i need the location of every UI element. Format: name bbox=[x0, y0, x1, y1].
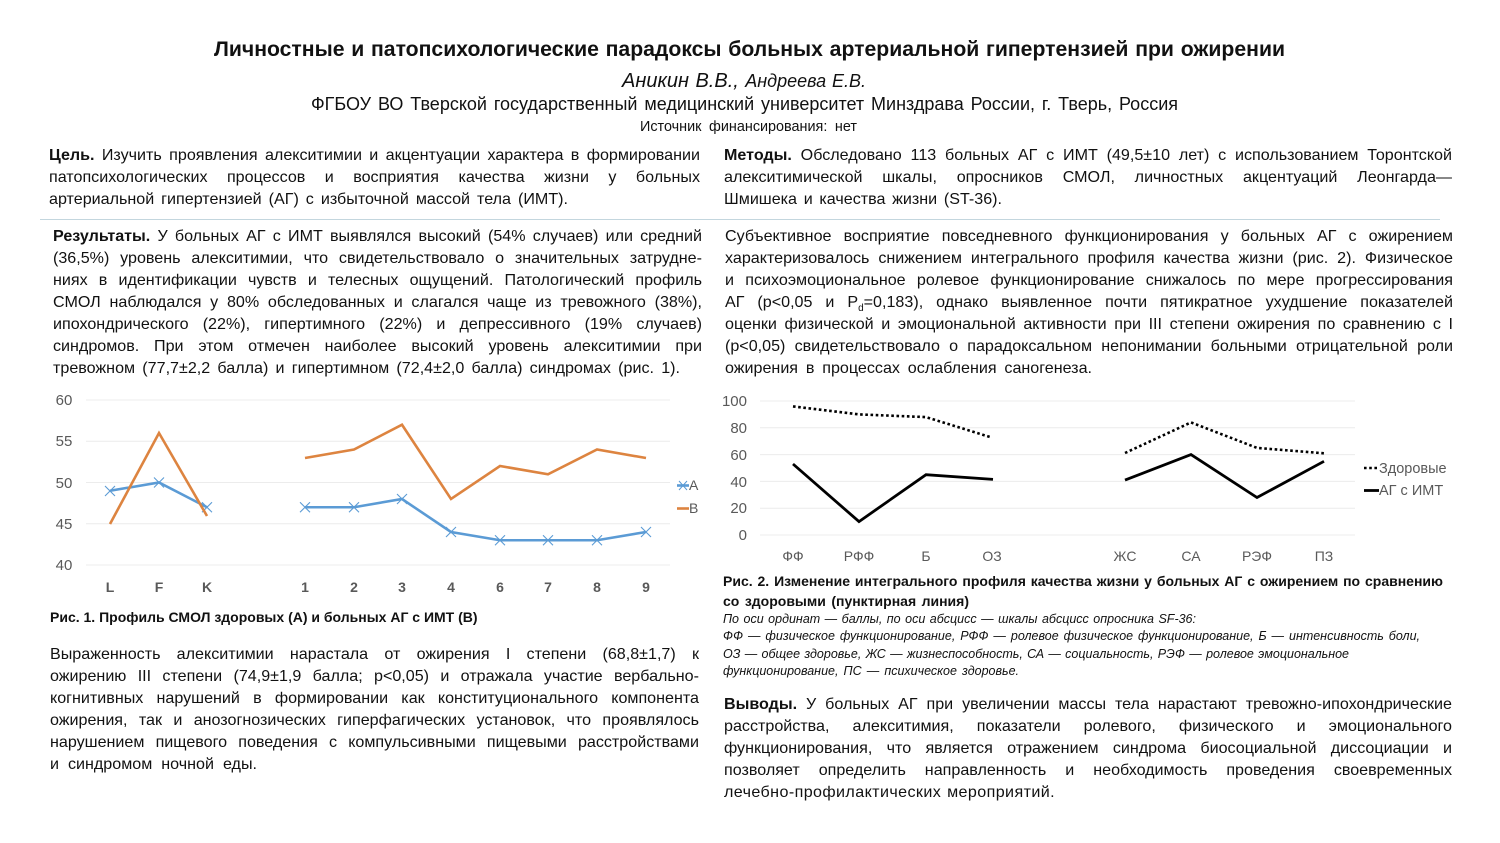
x axis labels: СА bbox=[1181, 548, 1201, 564]
text block: alexithymia: Выраженность алекситимии нарастала от ожирения I степени (68,8±1,7) к bbox=[50, 645, 699, 663]
text block: alexithymia: ожирения, так и анозогнозических гиперфагических установок, что проявлялось bbox=[50, 711, 699, 729]
y axis labels: 55 bbox=[56, 433, 72, 450]
text block: aim: артериальной гипертензией (АГ) с избыточной массой тела (ИМТ). bbox=[49, 190, 568, 208]
caption: figure 2 bbox=[723, 573, 1443, 609]
y axis labels: 40 bbox=[730, 474, 747, 491]
text block: subjective perception: характеризовалось снижением интегрального профиля качества жизни (рис. 2). Физическое bbox=[725, 249, 1453, 267]
y axis labels: 20 bbox=[730, 500, 747, 517]
y axis labels: 80 bbox=[730, 420, 747, 437]
figure 2 notes bbox=[723, 612, 1420, 678]
affiliation: ФГБОУ ВО Тверской государственный медицинский университет Минздрава России, г. Тверь, Россия bbox=[311, 94, 1178, 114]
text block: subjective perception: оценки физической и эмоциональной активности при III степени ожирения по сравнению с I bbox=[725, 315, 1453, 333]
legend: B bbox=[689, 500, 698, 516]
text block: alexithymia: ожирению III степени (74,9±1,9 балла; р<0,05) и отражала участие вербально- bbox=[50, 667, 699, 685]
series: healthy bbox=[793, 406, 1324, 453]
x axis labels: 2 bbox=[350, 579, 358, 595]
authors: Аникин В.В., Андреева Е.В. bbox=[622, 70, 866, 92]
x axis labels: ПЗ bbox=[1315, 548, 1333, 564]
y axis labels bbox=[56, 392, 72, 574]
x axis labels: РЭФ bbox=[1242, 548, 1272, 564]
funding source: Источник финансирования: нет bbox=[640, 119, 857, 135]
x axis labels: K bbox=[202, 579, 212, 595]
text block: aim: патопсихологических процессов и восприятия качества жизни у больных bbox=[49, 168, 700, 186]
x axis labels: 8 bbox=[593, 579, 601, 595]
x axis labels: 4 bbox=[447, 579, 455, 595]
text block: results bbox=[53, 227, 702, 377]
text block: conclusions: лечебно-профилактических мероприятий. bbox=[724, 783, 1055, 801]
text block: alexithymia: и синдромом ночной еды. bbox=[50, 755, 257, 773]
text block: subjective perception bbox=[725, 227, 1453, 377]
text block: methods: алекситимической шкалы, опросников СМОЛ, личностных акцентуаций Леонгарда— bbox=[724, 168, 1452, 186]
legend bbox=[1364, 461, 1447, 499]
y axis labels bbox=[722, 393, 747, 544]
series B bbox=[110, 425, 646, 524]
text block: conclusions: функционирования, что является отражением синдрома биосоциальной диссоциации и bbox=[724, 739, 1452, 757]
x axis labels: L bbox=[106, 579, 115, 595]
text block: subjective perception: ожирения в процессах ослабления саногенеза. bbox=[725, 359, 1092, 377]
x axis labels bbox=[106, 579, 650, 595]
x axis labels bbox=[782, 548, 1333, 564]
text block: aim: Цель. Изучить проявления алекситимии и акцентуации характера в формировании bbox=[49, 146, 700, 164]
text block: methods: Методы. Обследовано 113 больных АГ с ИМТ (49,5±10 лет) с использованием Торонтской bbox=[724, 146, 1452, 164]
series: hypertension with high BMI bbox=[793, 455, 1324, 522]
x axis labels: 7 bbox=[544, 579, 552, 595]
y axis labels: 40 bbox=[56, 557, 72, 574]
legend: Здоровые bbox=[1379, 461, 1447, 477]
text block: alexithymia: нарушением пищевого поведения с компульсивными пищевыми расстройствами bbox=[50, 733, 699, 751]
x axis labels: 9 bbox=[642, 579, 650, 595]
figure 2 notes: ОЗ — общее здоровье, ЖС — жизнеспособность, СА — социальность, РЭФ — ролевое эмоциональное bbox=[723, 647, 1349, 661]
y axis labels: 60 bbox=[56, 392, 72, 409]
y axis labels: 60 bbox=[730, 447, 747, 464]
text block: subjective perception: (р<0,05) свидетельствовало о парадоксальном непонимании больными отрицательной роли bbox=[725, 337, 1453, 355]
y axis labels: 45 bbox=[56, 516, 72, 533]
chart: MMPI profile (figure 1) bbox=[56, 392, 699, 595]
x axis labels: РФФ bbox=[844, 548, 874, 564]
x axis labels: 3 bbox=[398, 579, 406, 595]
series A bbox=[105, 478, 651, 545]
x axis labels: F bbox=[155, 579, 164, 595]
text block: aim bbox=[49, 146, 700, 208]
text block: results: синдромов. При этом отмечен наиболее высокий уровень алекситимии при bbox=[53, 337, 702, 355]
text block: conclusions: Выводы. У больных АГ при увеличении массы тела нарастают тревожно-ипохондрические bbox=[724, 695, 1452, 713]
text block: conclusions: позволяет определить направленность и необходимость проведения своевременных bbox=[724, 761, 1452, 779]
figure 2 notes: ФФ — физическое функционирование, РФФ — ролевое физическое функционирование, Б — интенсивность боли, bbox=[723, 629, 1420, 643]
legend bbox=[677, 477, 699, 516]
text block: conclusions: расстройства, алекситимия, показатели ролевого, физического и эмоционального bbox=[724, 717, 1452, 735]
text block: results: (36,5%) уровень алекситимии, что свидетельствовало о значительных затрудне- bbox=[53, 249, 702, 267]
x axis labels: ОЗ bbox=[982, 548, 1002, 564]
text block: subjective perception: Субъективное восприятие повседневного функционирования у больных АГ с ожирением bbox=[725, 227, 1453, 245]
text block: conclusions bbox=[724, 695, 1452, 801]
text block: alexithymia bbox=[50, 645, 700, 773]
x axis labels: ЖС bbox=[1114, 548, 1136, 564]
text block: methods: Шмишека и качества жизни (ST-36). bbox=[724, 190, 1002, 208]
text block: methods bbox=[724, 146, 1452, 208]
text block: results: ниях в идентификации чувств и телесных ощущений. Патологический профиль bbox=[53, 271, 702, 289]
y axis labels: 50 bbox=[56, 475, 72, 492]
legend: A bbox=[689, 477, 699, 493]
title: Личностные и патопсихологические парадоксы больных артериальной гипертензией при ожирении bbox=[214, 38, 1285, 61]
figure 2 notes: По оси ординат — баллы, по оси абсцисс — шкалы абсцисс опросника SF-36: bbox=[723, 612, 1196, 626]
x axis labels: 6 bbox=[496, 579, 504, 595]
x axis labels: Б bbox=[921, 548, 931, 564]
caption: figure 2: со здоровыми (пунктирная линия) bbox=[723, 593, 969, 609]
text block: results: СМОЛ наблюдался у 80% обследованных и слагался чаще из тревожного (38%), bbox=[53, 293, 702, 311]
text block: results: тревожном (77,7±2,2 балла) и гипертимном (72,4±2,0 балла) синдромах (рис. 1). bbox=[53, 359, 680, 377]
caption: figure 1: Рис. 1. Профиль СМОЛ здоровых (А) и больных АГ с ИМТ (В) bbox=[50, 609, 478, 625]
legend: АГ с ИМТ bbox=[1379, 483, 1443, 499]
figure 2 notes: функционирование, ПС — психическое здоровье. bbox=[723, 664, 1019, 678]
x axis labels: ФФ bbox=[782, 548, 804, 564]
caption: figure 2: Рис. 2. Изменение интегрального профиля качества жизни у больных АГ с ожирением по сравнению bbox=[723, 573, 1443, 589]
y axis labels: 0 bbox=[739, 527, 747, 544]
text block: alexithymia: когнитивных нарушений в формировании как конституционального компонента bbox=[50, 689, 699, 707]
y axis labels: 100 bbox=[722, 393, 747, 410]
text block: subjective perception: АГ (р<0,05 и Pd=0,183), однако выявленное почти пятикратное ухудшение показателей bbox=[725, 293, 1453, 314]
chart: quality of life profile (figure 2) bbox=[722, 393, 1447, 564]
x axis labels: 1 bbox=[301, 579, 309, 595]
text block: results: ипохондрического (22%), гипертимного (22%) и депрессивного (19% случаев) bbox=[53, 315, 702, 333]
text block: subjective perception: и психоэмоциональное ролевое функционирование снижалось по мере прогрессирования bbox=[725, 271, 1453, 289]
text block: results: Результаты. У больных АГ с ИМТ выявлялся высокий (54% случаев) или средний bbox=[53, 227, 702, 245]
